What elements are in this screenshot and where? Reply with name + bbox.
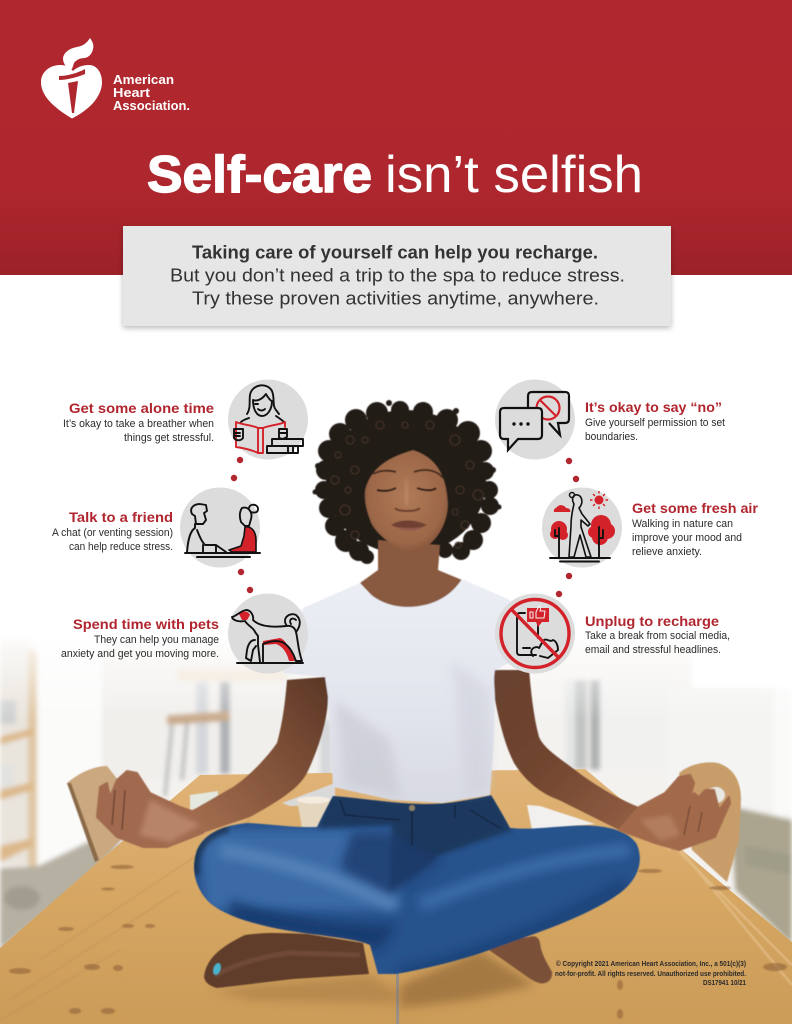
- icon: speech bubbles saying no: [495, 380, 575, 460]
- white t-shirt: [283, 579, 515, 803]
- right chair: [679, 762, 741, 882]
- text: get some alone time: things get stressful.: [124, 432, 214, 444]
- text: it's okay to say no: boundaries.: [585, 431, 638, 443]
- text: unplug to recharge: Take a break from social media,: [585, 630, 730, 642]
- left chair: [67, 766, 122, 863]
- copyright: DS17941 10/21: [703, 980, 746, 987]
- wooden table: [0, 769, 792, 1024]
- text: talk to a friend: [52, 510, 173, 553]
- logo heart and torch: [41, 38, 102, 118]
- text: unplug to recharge: Unplug to recharge: [585, 614, 720, 629]
- header band: [0, 0, 792, 275]
- right foot: [489, 936, 552, 983]
- text: get some alone time: [63, 401, 215, 444]
- text: it's okay to say no: [585, 400, 725, 443]
- copyright: [555, 960, 746, 987]
- text: spend time with pets: They can help you manage: [94, 634, 219, 646]
- intro text: Try these proven activities anytime, anywhere.: [192, 288, 599, 308]
- title: isn’t selfish: [385, 146, 643, 204]
- jeans: [194, 795, 640, 975]
- logo wordmark: Heart: [113, 85, 151, 100]
- left arm and hand: [97, 677, 328, 847]
- neck: [360, 540, 462, 610]
- intro text: Taking care of yourself can help you recharge.: [192, 242, 598, 262]
- left foot: [204, 933, 369, 988]
- logo wordmark: American: [113, 72, 174, 87]
- text: get some fresh air: [632, 501, 759, 558]
- copyright: © Copyright 2021 American Heart Association, Inc., a 501(c)(3): [556, 960, 746, 968]
- text: get some fresh air: improve your mood and: [632, 532, 742, 544]
- logo wordmark: Association.: [113, 98, 190, 113]
- text: spend time with pets: anxiety and get you moving more.: [61, 648, 219, 660]
- icon: person walking in nature: [542, 488, 622, 568]
- connector dots: [231, 457, 579, 597]
- panel: photo of woman meditating on a table: [0, 399, 792, 1024]
- blurred room background: [0, 640, 792, 960]
- icon: dog: [228, 594, 308, 674]
- face: [365, 450, 448, 553]
- text: it's okay to say no: It’s okay to say “no”: [585, 400, 722, 415]
- icon: two friends talking: [180, 488, 260, 568]
- papers and cup on the table: [190, 783, 595, 830]
- text: spend time with pets: [61, 617, 219, 660]
- title: Self-care: [147, 146, 372, 204]
- intro panel: [123, 226, 671, 326]
- text: unplug to recharge: email and stressful headlines.: [585, 644, 721, 656]
- text: talk to a friend: A chat (or venting session): [52, 527, 173, 539]
- text: get some alone time: It’s okay to take a breather when: [63, 418, 214, 430]
- hair: [312, 400, 502, 564]
- intro text: [170, 242, 625, 308]
- text: get some fresh air: Get some fresh air: [632, 501, 759, 516]
- text: get some fresh air: relieve anxiety.: [632, 546, 702, 558]
- logo wordmark: [113, 72, 190, 113]
- text: get some fresh air: Walking in nature can: [632, 518, 733, 530]
- icon: woman reading a book: [228, 380, 308, 460]
- text: get some alone time: Get some alone time: [69, 401, 215, 416]
- intro text: But you don’t need a trip to the spa to reduce stress.: [170, 266, 625, 286]
- woman upper body: [97, 540, 730, 850]
- logo: American Heart Association: [41, 38, 190, 118]
- woman: [194, 795, 640, 988]
- text: it's okay to say no: Give yourself permission to set: [585, 417, 725, 429]
- text: spend time with pets: Spend time with pets: [73, 617, 219, 632]
- right arm and hand: [494, 670, 730, 850]
- text: unplug to recharge: [585, 614, 730, 656]
- icon: no phone: [495, 594, 575, 674]
- text: talk to a friend: can help reduce stress.: [69, 541, 173, 553]
- copyright: not-for-profit. All rights reserved. Unauthorized use prohibited.: [555, 971, 746, 978]
- text: talk to a friend: Talk to a friend: [69, 510, 173, 525]
